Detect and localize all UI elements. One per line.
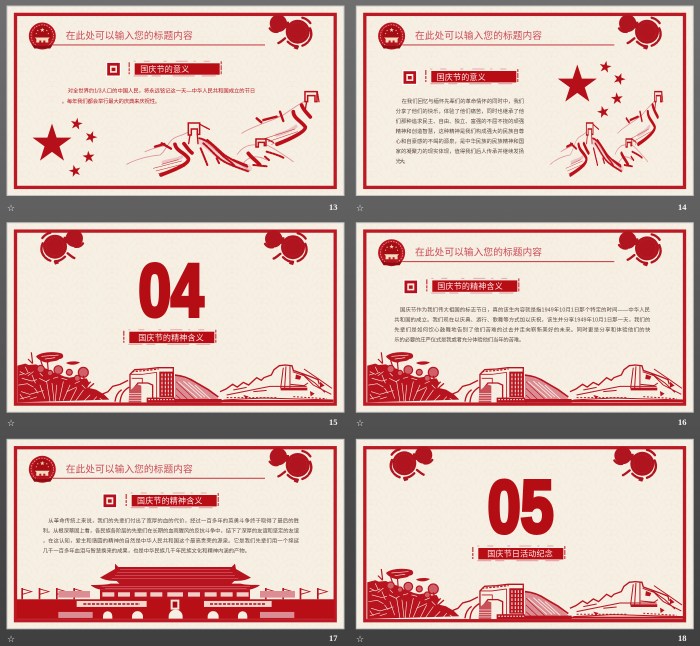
icon: lanterns left — [41, 230, 83, 265]
icon: national emblem — [378, 239, 405, 266]
portrait — [171, 600, 179, 610]
slogan boards — [77, 601, 272, 607]
icon: national emblem — [29, 456, 56, 483]
text block: 共和国的成立。我们现在以庆典、游行、歌舞等方式加以庆祝，该生并分享1949年10月1日那一天，我们的 — [394, 315, 650, 323]
section banner — [473, 546, 565, 561]
footer: slide 14: ☆ — [356, 204, 364, 214]
panel: slide 13 — [7, 6, 344, 196]
icon: lanterns right — [614, 447, 656, 482]
heading: 在此处可以输入您的标题内容 — [66, 29, 193, 42]
icon: section badge — [106, 62, 121, 77]
section banner — [129, 61, 221, 76]
text block: 利。从根深蒂固上看，各民族各阶层的先辈们在长期的血雨腥风的反抗斗争中，结下了深厚的友谊和坚定的友谊 — [43, 526, 300, 534]
section number: 05 — [488, 465, 554, 548]
text block: 先辈们是如何饮心鼓舞地告别了他们苦难的过去并走向崭新美好的未来。同时更是分享和体验他们的快 — [394, 325, 651, 333]
text block: 心和自豪感的不竭的源泉，是中华民族的民族精神和国 — [396, 137, 524, 145]
illustration: paper-cut landscape — [17, 352, 333, 402]
icon: section badge — [402, 70, 417, 85]
text block — [394, 305, 651, 343]
text block: 乐的必要的庄严仪式是我或者充分体验他们当年的苦难。 — [394, 335, 524, 343]
text block: 家的凝聚力的现实体现，值得我们后人传承并继续发扬 — [396, 147, 524, 155]
footer: slide 15: ☆ — [7, 419, 15, 429]
icon: lanterns — [270, 448, 311, 483]
section banner: 国庆节的精神含义 — [437, 281, 503, 291]
text block: 国庆节作为我们伟大祖国的标志节日，真的该生内容就是指1949年10月1日那个特定的时间——中华人民 — [400, 305, 650, 313]
section banner — [126, 493, 218, 508]
text block — [62, 87, 255, 105]
section banner — [124, 330, 216, 344]
icon: lanterns right — [265, 230, 307, 265]
section banner: 国庆节的精神含义 — [137, 496, 202, 506]
footer: slide 15 — [7, 417, 338, 429]
panel: slide 16 — [356, 223, 693, 412]
icon: lanterns — [619, 15, 661, 50]
icon: five stars — [558, 60, 627, 118]
footer: slide 16: 16 — [678, 417, 686, 427]
heading: 在此处可以输入您的标题内容 — [415, 29, 542, 42]
bridges — [58, 612, 294, 618]
icon: national emblem — [378, 22, 405, 50]
footer: slide 16 — [356, 417, 686, 429]
icon: lanterns left — [391, 446, 432, 481]
illustration: great wall — [127, 92, 319, 175]
section banner: 国庆节的精神含义 — [138, 332, 204, 342]
section number: 04 — [138, 249, 204, 332]
section banner: 国庆节的意义 — [140, 64, 189, 74]
wall base — [17, 599, 334, 619]
footer: slide 13: ☆ — [7, 204, 15, 214]
section banner — [426, 69, 518, 84]
icon: section badge — [403, 279, 418, 294]
footer: slide 18 — [356, 633, 686, 645]
text block — [396, 97, 525, 165]
text block: 精神和创造智慧，这种精神是我们构成强大的民族自尊 — [396, 127, 525, 135]
panel: slide 15 — [7, 223, 344, 412]
text block: 在我们回忆与缅怀先辈们的革命情怀的同时中，我们 — [402, 97, 524, 105]
text block: 从革命传统上来说，我们的先辈们付出了宽厚的血的代价，经过一百多年的英勇斗争终于取得了最后的胜 — [48, 516, 300, 524]
section banner: 国庆节日活动纪念 — [487, 549, 553, 559]
footer: slide 16: ☆ — [356, 419, 364, 429]
flags — [21, 588, 329, 599]
footer: slide 14 — [356, 202, 687, 214]
illustration: Tiananmen gate — [17, 564, 334, 619]
arches — [103, 610, 247, 619]
illustration: great wall — [550, 92, 663, 175]
text block: 对全世界约1/3人口的中国人民，将永远铭记这一天—中华人民共和国成立的节日 — [68, 87, 255, 95]
panel: slide 14 — [356, 6, 693, 196]
text block: 。每年我们都会举行最大的庆典来庆祝性。 — [62, 97, 160, 105]
panel: slide 18 — [356, 439, 693, 629]
section banner — [427, 278, 519, 293]
text block — [43, 516, 300, 554]
icon: five stars — [33, 117, 99, 177]
footer: slide 15: 15 — [329, 417, 338, 427]
footer: slide 13 — [7, 202, 338, 214]
heading: 在此处可以输入您的标题内容 — [66, 462, 193, 475]
icon: national emblem — [29, 22, 56, 50]
text block: 分享了他们的快乐，体验了他们痛苦，同时也继承了他 — [396, 107, 525, 115]
icon: lanterns — [619, 231, 661, 266]
icon: lanterns — [270, 15, 311, 50]
footer: slide 17: ☆ — [7, 635, 15, 645]
icon: section badge — [102, 493, 117, 508]
footer: slide 17: 17 — [329, 633, 338, 643]
footer: slide 18: ☆ — [356, 635, 364, 645]
footer: slide 18: 18 — [678, 633, 686, 643]
panel: slide 17 — [7, 439, 344, 629]
heading: 在此处可以输入您的标题内容 — [415, 246, 542, 259]
text block: 光大。 — [396, 157, 409, 165]
footer: slide 17 — [7, 633, 338, 645]
illustration: paper-cut landscape — [367, 352, 683, 402]
text block: 们那种追求民主、自由、独立、富强的不屈不挠的顽强 — [396, 117, 525, 125]
illustration: paper-cut landscape — [367, 569, 683, 619]
footer: slide 14: 14 — [678, 202, 687, 212]
text block: 几千一百多年血泪与智慧换来的成果，也是中华民族几千年民族文化和精神内涵的产物。 — [43, 546, 250, 554]
section banner: 国庆节的意义 — [437, 72, 486, 82]
text block: ，在这认知，爱主和谐圆的精神的自然是中华人民共和国这个最高贵荣的源泉。它是我们先辈们用一个绵延 — [43, 536, 300, 544]
footer: slide 13: 13 — [329, 202, 338, 212]
